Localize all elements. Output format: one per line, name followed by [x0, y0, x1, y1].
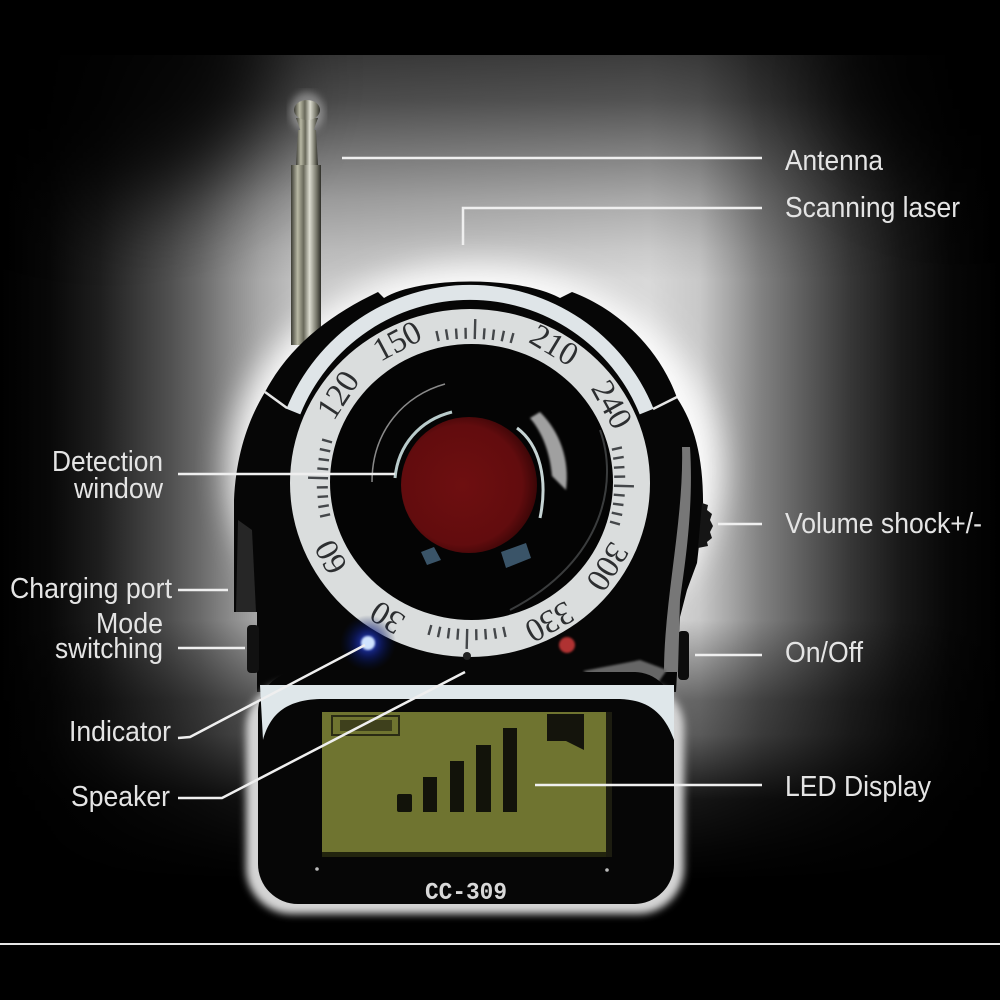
label: Scanning laser [463, 192, 960, 245]
label: Mode switching [55, 608, 245, 665]
label: Detection window [52, 446, 395, 505]
detection lens [372, 384, 567, 568]
charging port side panel [236, 520, 256, 612]
indicator LEDs [340, 615, 575, 671]
mode switching button [247, 625, 259, 673]
dial inner black [330, 344, 613, 620]
screen corner dots [315, 867, 609, 872]
dial tick marks [307, 318, 635, 650]
model name: CC-309 [425, 880, 507, 907]
white arc band [286, 285, 654, 414]
dial numbers: 330 [519, 593, 579, 649]
dial numbers: 30 [364, 593, 411, 641]
red window [401, 417, 537, 553]
dial inner rim highlight [510, 430, 607, 610]
right strip end line [653, 397, 677, 409]
label: Speaker [71, 672, 465, 813]
label: Antenna: Antenna [785, 145, 884, 177]
dial numbers: 240 [583, 375, 639, 435]
dial ring [290, 309, 650, 657]
right side gray strip [664, 447, 691, 672]
label: On/Off: On/Off [785, 637, 864, 669]
dial numbers: 300 [578, 536, 635, 597]
antenna [290, 92, 324, 345]
label: Speaker: Speaker [71, 781, 170, 813]
volume wheel [698, 503, 713, 548]
label: Charging port: Charging port [10, 573, 172, 605]
dial numbers [308, 314, 639, 649]
label: Mode switching: Mode [96, 608, 163, 640]
label: Scanning laser: Scanning laser [785, 192, 960, 224]
white display bezel band [260, 685, 674, 740]
device body [234, 282, 713, 914]
dial numbers: 210 [523, 318, 584, 374]
left strip end line [265, 392, 287, 408]
dial numbers: 60 [308, 534, 355, 580]
lower housing [258, 672, 674, 904]
speaker icon [547, 714, 584, 750]
lower housing glow edge [246, 682, 684, 914]
signal bars [397, 728, 517, 812]
dial numbers: 150 [367, 314, 428, 369]
LCD screen [322, 712, 612, 857]
label: Indicator: Indicator [69, 716, 171, 748]
label: Mode switching: switching [55, 633, 163, 665]
label: Volume shock: Volume shock+/- [785, 508, 982, 540]
label: LED Display: LED Display [785, 771, 931, 803]
gray wedge [583, 660, 667, 684]
main housing [234, 282, 703, 692]
label: Detection window: Detection [52, 446, 163, 478]
battery icon [332, 716, 399, 735]
label: Detection window: window [73, 473, 164, 505]
label: Indicator [69, 645, 365, 748]
dial numbers: 120 [310, 365, 367, 426]
on/off button [678, 631, 689, 680]
